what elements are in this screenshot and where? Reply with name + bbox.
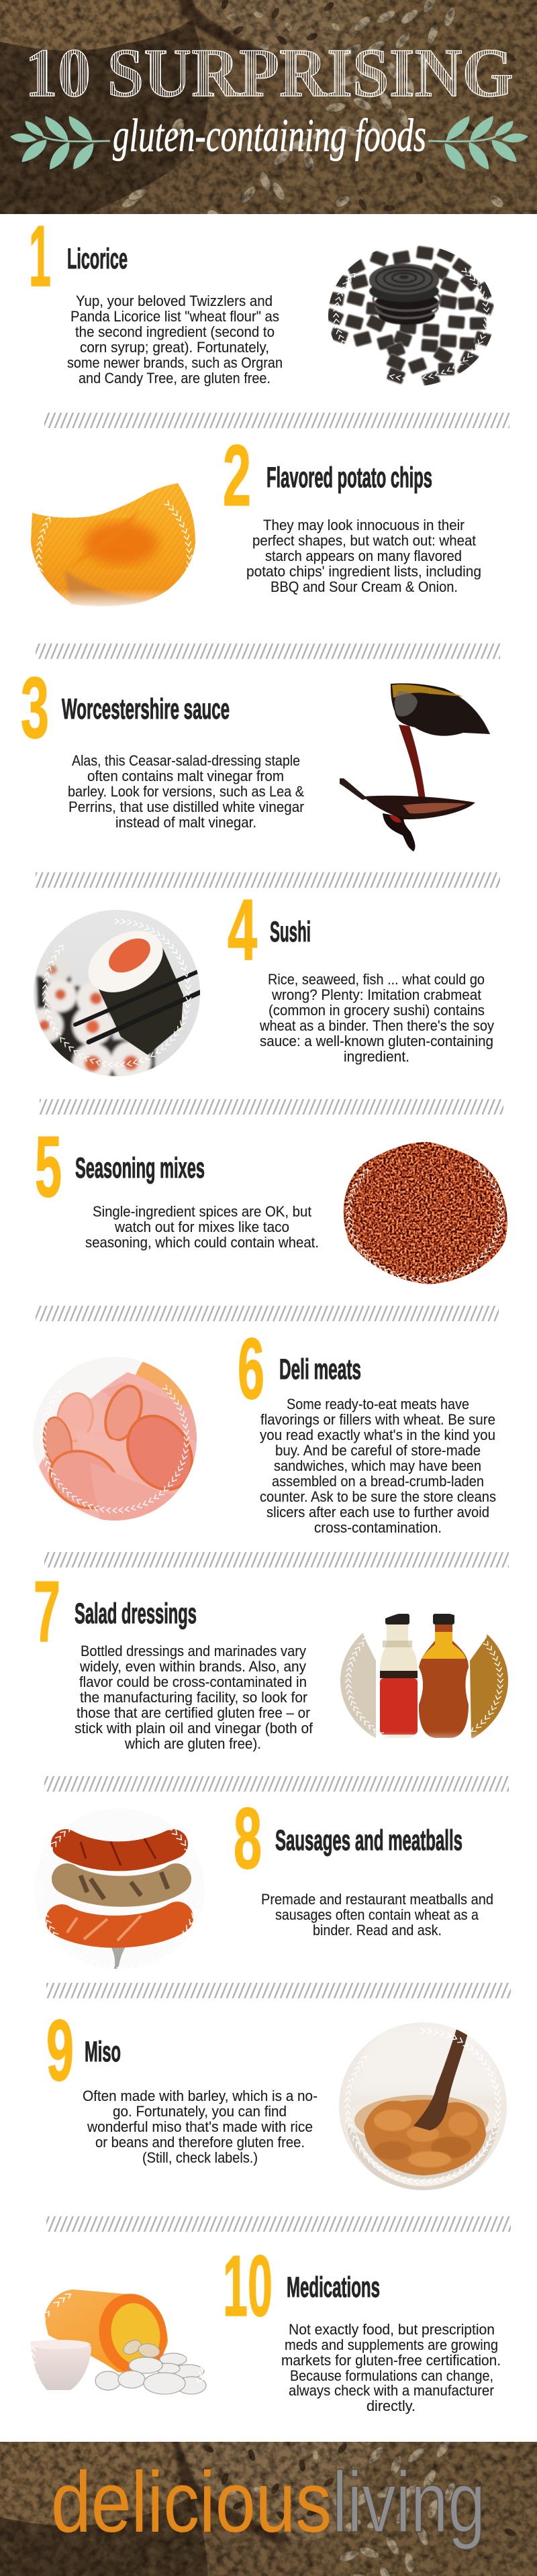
body text: Alas, this Ceasar-salad-dressing staple	[72, 752, 300, 769]
body text: corn syrup; great). Fortunately,	[80, 339, 269, 356]
body text: sauce: a well-known gluten-containing	[260, 1033, 493, 1049]
logo: delicious	[51, 2455, 332, 2551]
divider	[44, 1552, 509, 1567]
body text: Perrins, that use distilled white vinegar	[68, 798, 304, 815]
body text	[85, 1203, 319, 1251]
body text: cross-contamination.	[314, 1519, 442, 1536]
body text: ingredient.	[344, 1048, 409, 1065]
body text: sandwiches, which may have been	[274, 1457, 481, 1474]
body text: Because formulations can change,	[290, 2367, 493, 2384]
divider	[40, 1099, 503, 1115]
icon: left leaf sprig	[10, 116, 110, 170]
number 6: 6	[238, 1321, 264, 1417]
body text: and Candy Tree, are gluten free.	[79, 370, 271, 387]
logo: living	[332, 2455, 485, 2551]
body text: the manufacturing facility, so look for	[80, 1689, 307, 1706]
heading: Salad dressings: Salad dressings	[75, 1598, 197, 1630]
body text: often contains malt vinegar from	[87, 768, 284, 784]
image: sausages on a fork	[23, 1808, 205, 1986]
body text: Not exactly food, but prescription	[289, 2321, 495, 2338]
header banner	[0, 0, 537, 229]
image: sauce pouring into spoon	[340, 683, 490, 852]
number 7: 7	[34, 1563, 60, 1660]
body text: binder. Read and ask.	[313, 1922, 442, 1939]
body text	[67, 293, 283, 387]
body text: markets for gluten-free certification.	[281, 2352, 501, 2369]
image: sliced deli meat	[33, 1357, 197, 1521]
body text: buy. And be careful of store-made	[275, 1442, 481, 1459]
panel: 3 worcestershire sauce	[21, 660, 490, 852]
body text: Yup, your beloved Twizzlers and	[76, 293, 273, 309]
divider	[46, 2216, 511, 2232]
image: salad dressing bottles	[340, 1614, 508, 1738]
panel: 7 salad dressings	[35, 1581, 508, 1751]
title: 10 SURPRISING	[25, 35, 514, 111]
image: sushi roll in chopsticks	[34, 910, 200, 1076]
body text	[261, 1891, 493, 1939]
body text: (Still, check labels.)	[142, 2149, 258, 2166]
body text: the second ingredient (second to	[75, 323, 275, 340]
divider	[36, 1306, 499, 1321]
panel: 8 sausages and meatballs	[23, 1790, 493, 1986]
body text	[260, 1396, 496, 1536]
panel: 1 licorice: 1	[29, 208, 51, 305]
body text: widely, even within brands. Also, any	[79, 1658, 307, 1675]
heading: Worcestershire sauce: Worcestershire sauce	[62, 693, 230, 725]
heading: Sushi: Sushi	[270, 916, 311, 948]
divider	[46, 1983, 511, 1998]
number 5: 5	[35, 1119, 62, 1215]
body text: watch out for mixes like taco	[114, 1219, 289, 1235]
heading: Deli meats: Deli meats	[279, 1353, 361, 1386]
heading: Miso: Miso	[85, 2036, 121, 2068]
body text: wheat as a binder. Then there's the soy	[259, 1017, 495, 1034]
body text: meds and supplements are growing	[285, 2336, 498, 2353]
body text	[68, 752, 304, 831]
heading: Medications: Medications	[287, 2271, 380, 2304]
heading: Licorice: Licorice	[67, 243, 128, 275]
body text: BBQ and Sour Cream & Onion.	[271, 578, 458, 595]
body text: you read exactly what's in the kind you	[260, 1427, 495, 1443]
number 9: 9	[46, 2002, 74, 2099]
panel: 6 deli meats	[33, 1337, 495, 1533]
body text: Premade and restaurant meatballs and	[261, 1891, 493, 1908]
number 10: 10	[223, 2238, 273, 2334]
body text	[246, 517, 481, 595]
panel: 10 medications	[28, 2238, 501, 2418]
body text: which are gluten free).	[124, 1735, 261, 1752]
body text: stick with plain oil and vinegar (both of	[75, 1720, 313, 1737]
body text: Often made with barley, which is a no-	[83, 2088, 318, 2104]
number 3: 3	[21, 660, 49, 756]
body text: some newer brands, such as Orgran	[67, 354, 283, 371]
body text	[83, 2088, 318, 2166]
body text: those that are certified gluten free – or	[77, 1704, 310, 1721]
panel: 2 flavored potato chips	[3, 427, 481, 668]
body text: seasoning, which could contain wheat.	[85, 1234, 319, 1251]
panel: 9 miso	[48, 2019, 507, 2190]
divider	[36, 643, 500, 659]
image: seasoning pile	[312, 1142, 537, 1311]
body text: flavor could be cross-contaminated in	[79, 1673, 307, 1690]
body text: counter. Ask to be sure the store cleans	[260, 1488, 496, 1505]
body text: Single-ingredient spices are OK, but	[93, 1203, 312, 1220]
body text: barley. Look for versions, such as Lea &	[68, 783, 304, 800]
body text: instead of malt vinegar.	[115, 814, 256, 831]
body text: (common in grocery sushi) contains	[268, 1002, 485, 1019]
body text: assembled on a bread-crumb-laden	[272, 1473, 484, 1490]
footer banner	[0, 2442, 537, 2576]
header photo background	[0, 0, 537, 229]
body text: slicers after each use to further avoid	[266, 1504, 489, 1521]
image: potato chip	[3, 483, 226, 668]
body text: Rice, seaweed, fish ... what could go	[268, 971, 485, 988]
panel: 4 sushi	[34, 899, 494, 1076]
body text: wonderful miso that's made with rice	[87, 2118, 313, 2135]
icon: right leaf sprig	[428, 116, 528, 170]
divider	[44, 1776, 509, 1792]
body text: potato chips' ingredient lists, including	[246, 563, 481, 580]
image: licorice pile	[328, 245, 494, 386]
panel: 5 seasoning mixes	[35, 1119, 537, 1311]
body text: They may look innocuous in their	[263, 517, 465, 533]
panel: 1 licorice	[31, 225, 494, 387]
body text	[75, 1643, 313, 1752]
body text	[259, 971, 495, 1065]
body text: wrong? Plenty: Imitation crabmeat	[271, 986, 482, 1003]
number 8: 8	[234, 1790, 262, 1887]
body text: starch appears on many flavored	[265, 548, 462, 564]
heading: Seasoning mixes: Seasoning mixes	[75, 1152, 205, 1184]
divider	[36, 872, 500, 888]
body text: always check with a manufacturer	[289, 2382, 494, 2399]
image: spilled pill bottle	[28, 2287, 207, 2418]
body text: flavorings or fillers with wheat. Be sure	[260, 1411, 495, 1428]
body text: Panda Licorice list "wheat flour" as	[70, 308, 279, 325]
body text: perfect shapes, but watch out: wheat	[252, 532, 477, 549]
body text: Bottled dressings and marinades vary	[81, 1643, 307, 1659]
number 4: 4	[228, 882, 257, 978]
number 2: 2	[223, 427, 251, 524]
body text: sausages often contain wheat as a	[275, 1906, 479, 1923]
body text: Some ready-to-eat meats have	[287, 1396, 469, 1412]
body text: or beans and therefore gluten free.	[95, 2134, 305, 2151]
body text: directly.	[367, 2398, 416, 2414]
divider	[44, 413, 509, 428]
body text	[281, 2321, 501, 2414]
body text: go. Fortunately, you can find	[113, 2103, 287, 2120]
footer photo background	[0, 2442, 537, 2576]
image: miso in a bowl	[339, 2022, 507, 2190]
